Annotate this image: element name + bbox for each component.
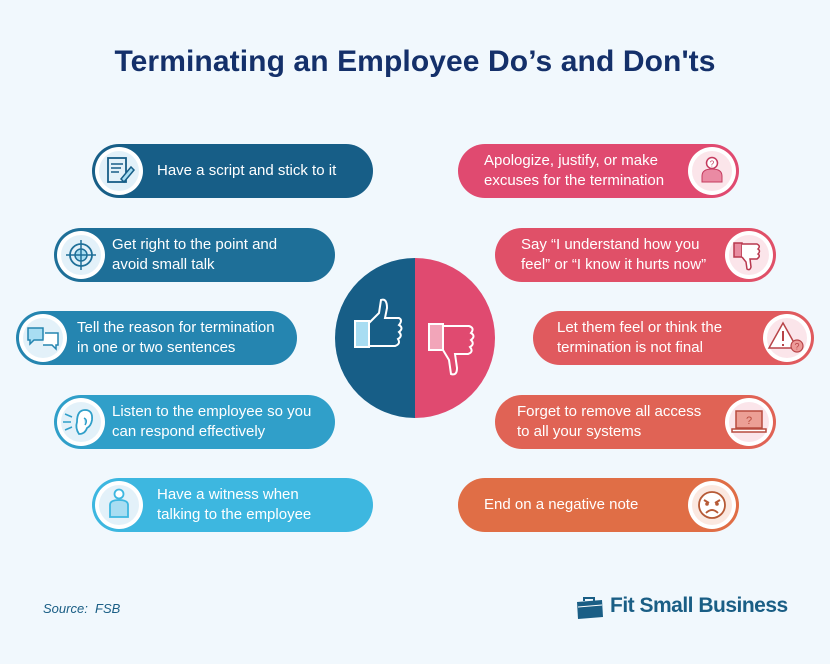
title: Terminating an Employee Do’s and Don'ts [114, 45, 716, 78]
panel: dont 5: End on a negative note [484, 496, 638, 513]
panel: do 5: Have a witness when [157, 486, 299, 503]
panel: do 2: avoid small talk [112, 256, 215, 273]
icon: target [57, 231, 105, 279]
icon: thumbs up [355, 300, 402, 347]
panel: dont 2: feel” or “I know it hurts now” [521, 256, 706, 273]
panel: dont 1: excuses for the termination [484, 172, 664, 189]
panel: dont 4: to all your systems [517, 423, 641, 440]
panel: do 4 [54, 395, 335, 449]
icon: warning: ? [794, 342, 800, 352]
panel: dont 3: termination is not final [557, 339, 703, 356]
icon: speech bubbles [19, 314, 67, 362]
icon: person [95, 481, 143, 529]
panel: dont 1: Apologize, justify, or make [484, 152, 658, 169]
panel: dont 2 [495, 228, 776, 282]
panel: do 4: can respond effectively [112, 423, 265, 440]
panel: do 1 [92, 144, 373, 198]
source text: Source: FSB [43, 601, 120, 616]
panel: dont 4: Forget to remove all access [517, 403, 701, 420]
center circle [335, 258, 495, 418]
panel: do 5 [92, 478, 373, 532]
panel: dont 5 [458, 478, 739, 532]
icon: laptop [725, 398, 773, 446]
panel: do 3 [16, 311, 297, 365]
panel: do 3: in one or two sentences [77, 339, 235, 356]
panel: do 4: Listen to the employee so you [112, 403, 311, 420]
panel: do 2: Get right to the point and [112, 236, 277, 253]
icon: angry face [688, 481, 736, 529]
icon: thumbs down [725, 231, 773, 279]
icon: laptop: ? [746, 415, 752, 427]
panel: dont 4 [495, 395, 776, 449]
icon: person question: ? [710, 160, 715, 168]
panel: do 1: Have a script and stick to it [157, 162, 336, 179]
panel: dont 3: Let them feel or think the [557, 319, 722, 336]
panel: do 5: talking to the employee [157, 506, 311, 523]
panel: do 3: Tell the reason for termination [77, 319, 275, 336]
panel: do 2 [54, 228, 335, 282]
panel: dont 1 [458, 144, 739, 198]
icon: briefcase [577, 597, 603, 619]
icon: ear [57, 398, 105, 446]
icon: thumbs down [429, 324, 474, 374]
icon: person question [688, 147, 736, 195]
panel: dont 3 [533, 311, 814, 365]
icon: notepad [95, 147, 143, 195]
icon: warning [763, 314, 811, 362]
logo: Fit Small Business [610, 594, 788, 617]
panel: dont 2: Say “I understand how you [521, 236, 699, 253]
